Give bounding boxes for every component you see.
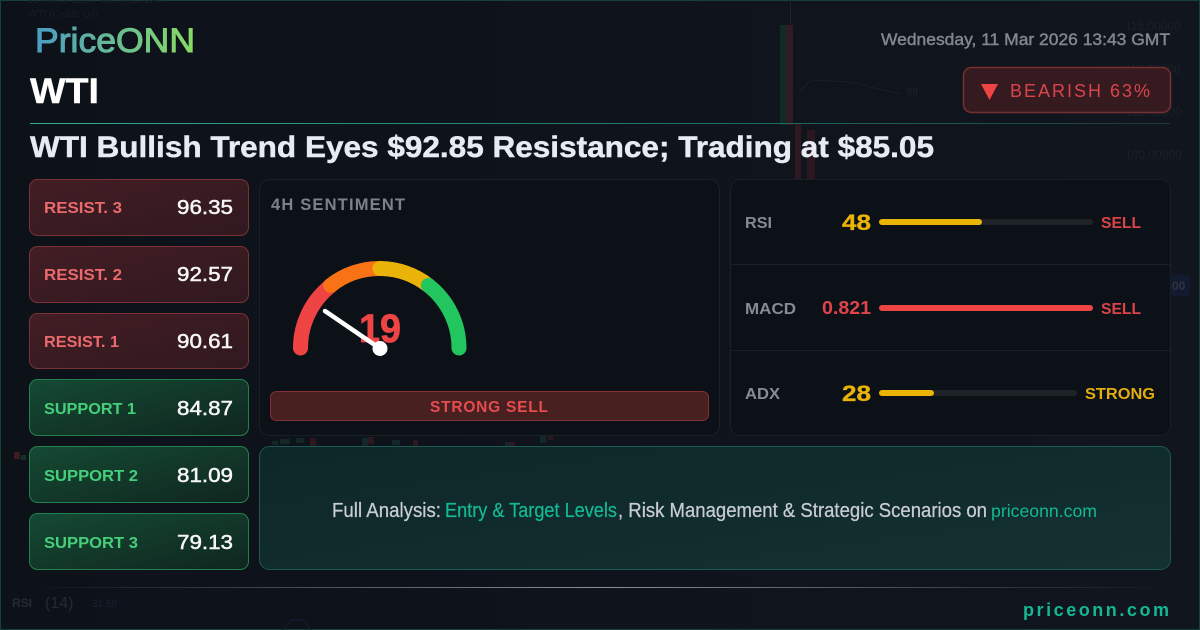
faint background chart: 105.00000 xyxy=(1125,105,1182,119)
footer website: priceonn.com xyxy=(1023,600,1169,620)
support 2 card xyxy=(30,446,248,502)
resistance 2 card: RESIST. 2 xyxy=(44,267,122,284)
gauge xyxy=(300,268,459,356)
bearish badge: BEARISH 63% xyxy=(1010,81,1150,101)
resistance 1 card xyxy=(30,314,248,368)
call to action text: , Risk Management & Strategic Scenarios on xyxy=(618,499,987,522)
date and time: Wednesday, 11 Mar 2026 13:43 GMT xyxy=(881,31,1170,49)
header rule xyxy=(30,123,1170,124)
gauge value: 19 xyxy=(359,307,401,351)
ADX row: 28 xyxy=(842,381,871,406)
resistance 3 card xyxy=(30,180,248,236)
resistance 1 card: 90.61 xyxy=(177,330,233,353)
panel: resistance levels xyxy=(30,180,248,368)
RSI row xyxy=(745,210,1141,235)
icon: down triangle xyxy=(981,84,998,100)
resistance 1 card: RESIST. 1 xyxy=(44,334,119,351)
logo: PriceONN xyxy=(35,22,195,60)
RSI row: RSI xyxy=(745,215,772,232)
support 3 card: SUPPORT 3 xyxy=(44,535,138,552)
faint background chart: 100.00000 xyxy=(1125,148,1182,162)
call to action text xyxy=(332,499,1097,522)
footer rule xyxy=(30,587,1170,588)
sentiment heading: 4H SENTIMENT xyxy=(271,196,405,214)
faint background chart: 31.68 xyxy=(92,599,117,610)
RSI row: 48 xyxy=(842,210,871,235)
support 2 card: SUPPORT 2 xyxy=(44,468,138,485)
faint background chart: 88 xyxy=(906,86,918,98)
call to action panel xyxy=(260,446,1170,570)
resistance 2 card xyxy=(30,246,248,302)
headline: WTI Bullish Trend Eyes $92.85 Resistance; Trading at $85.05 xyxy=(30,131,934,164)
faint background chart: WTI (Crude Oil) xyxy=(28,9,98,20)
support 1 card xyxy=(30,380,248,436)
gauge needle xyxy=(325,311,380,348)
strong sell bar xyxy=(270,392,708,420)
MACD row: SELL xyxy=(1101,301,1141,318)
faint background chart: 110.00000 xyxy=(1125,62,1181,76)
panel: support levels xyxy=(30,380,248,570)
MACD row: 0.821 xyxy=(822,298,871,318)
support 3 card: 79.13 xyxy=(177,531,233,554)
call to action text: Full Analysis: xyxy=(332,499,441,522)
panel: indicators xyxy=(730,180,1170,436)
MACD row: MACD xyxy=(745,301,796,318)
call to action text: Entry & Target Levels xyxy=(445,499,617,522)
resistance 3 card: 96.35 xyxy=(177,196,233,219)
support 1 card: SUPPORT 1 xyxy=(44,401,136,418)
bearish badge xyxy=(964,68,1170,112)
panel: 4H sentiment xyxy=(260,180,720,436)
support 2 card: 81.09 xyxy=(177,464,233,487)
call to action text: priceonn.com xyxy=(991,501,1097,521)
faint background chart: (14) xyxy=(45,595,73,612)
ADX row: ADX xyxy=(745,386,780,403)
MACD row xyxy=(745,298,1141,318)
faint background chart: 00 xyxy=(1172,279,1186,293)
support 3 card xyxy=(30,514,248,570)
resistance 3 card: RESIST. 3 xyxy=(44,200,122,217)
faint background chart: RSI xyxy=(12,596,32,610)
faint background chart: 115.00000 xyxy=(1125,19,1181,33)
RSI row: SELL xyxy=(1101,215,1141,232)
ADX row: STRONG xyxy=(1085,386,1155,403)
ADX row xyxy=(745,381,1155,406)
symbol heading: WTI xyxy=(30,72,99,111)
resistance 2 card: 92.57 xyxy=(177,263,233,286)
strong sell bar: STRONG SELL xyxy=(430,399,548,416)
support 1 card: 84.87 xyxy=(177,397,233,420)
